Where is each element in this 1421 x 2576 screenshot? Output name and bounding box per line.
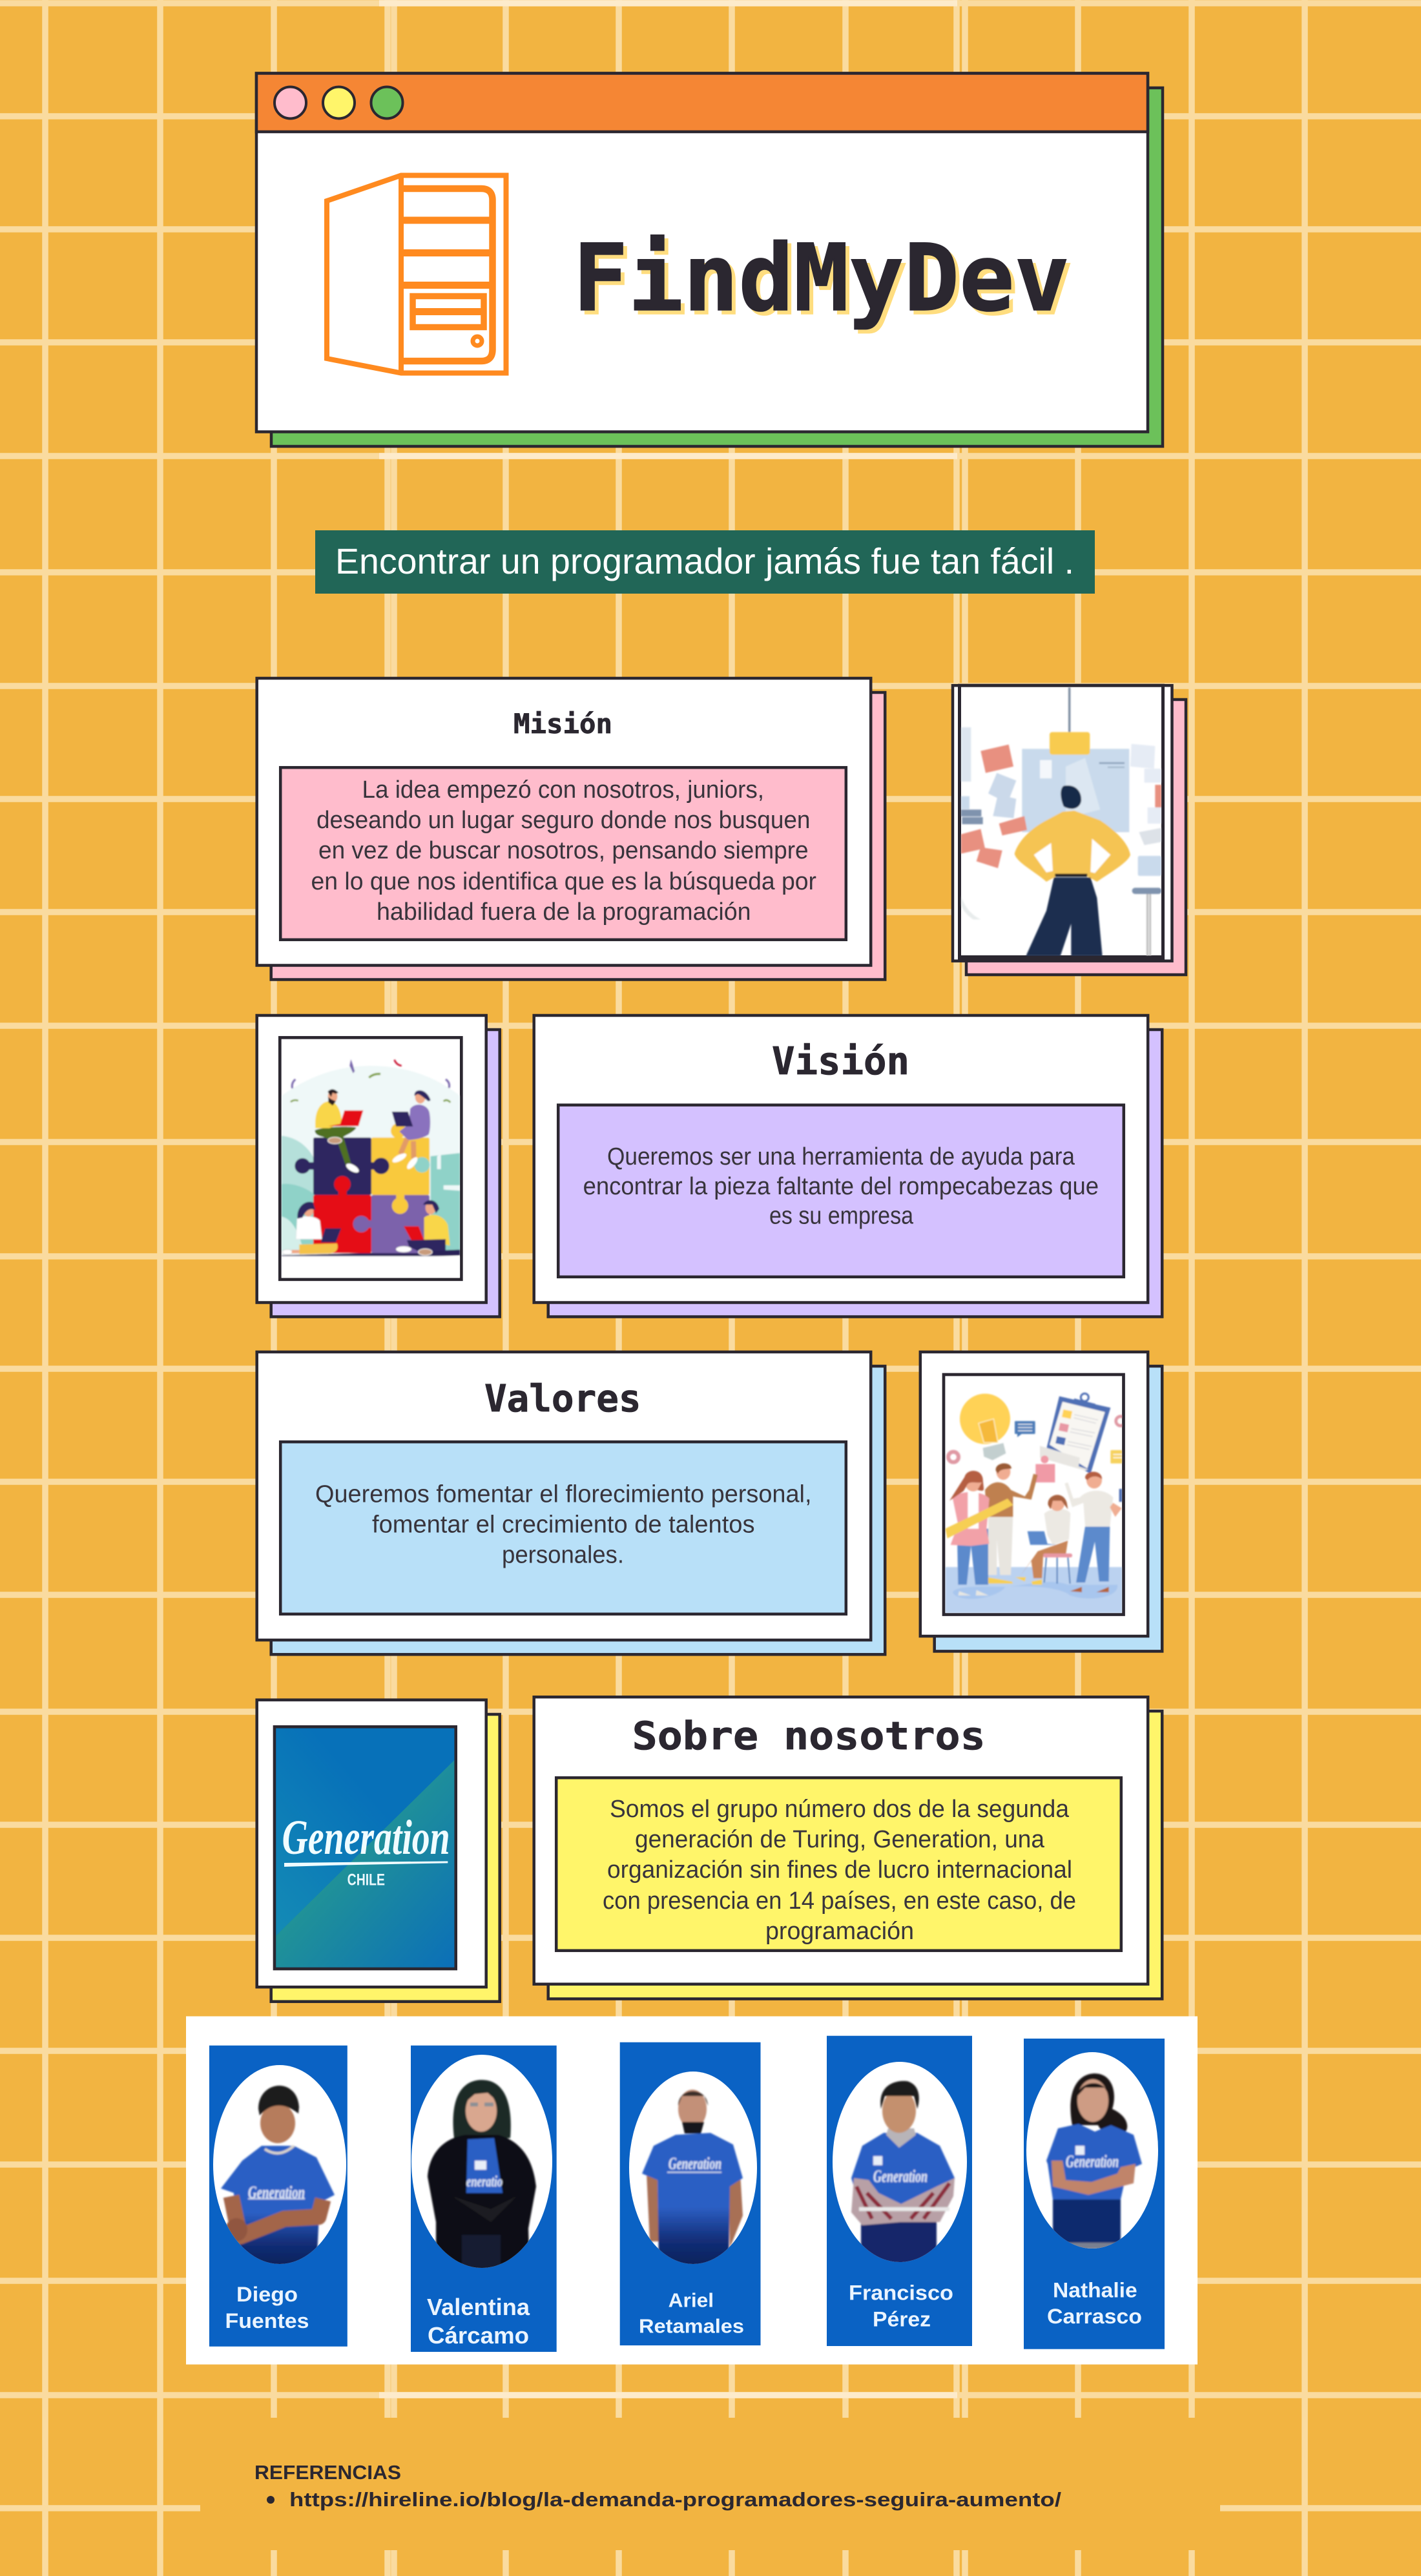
title: FindMyDev [577,228,1074,336]
team member: Nathalie Carrasco: Nathalie [1053,2279,1137,2302]
text block: sobre nosotros: programación [765,1918,914,1945]
panel: misión illustration [953,685,1186,975]
team member: Diego Fuentes: Fuentes [225,2309,309,2332]
panel: visión illustration [257,1015,500,1316]
man with pencil [988,1516,1013,1575]
illustration: team with ideas [945,1393,1125,1613]
text block: sobre nosotros: organización sin fines de lucro internacional [607,1856,1072,1884]
text block: misión [280,767,846,940]
text block: visión: Queremos ser una herramienta de ayuda para [607,1143,1075,1170]
woman with pencil [957,1529,988,1584]
panel: valores illustration [920,1352,1162,1651]
text block: valores: personales. [502,1542,624,1569]
tagline banner [315,530,1095,594]
team member: Ariel Retamales: Ariel [669,2289,714,2312]
illustration: person facing board [961,687,1161,956]
references [254,2461,1061,2511]
panel: Misión [257,678,885,979]
team member: Diego Fuentes: Generation [248,2183,305,2202]
references: REFERENCIAS [254,2461,401,2484]
text block: visión: encontrar la pieza faltante del rompecabezas que [583,1173,1099,1200]
text block: visión: es su empresa [769,1203,914,1230]
woman bottom-left [296,1216,322,1239]
woman bottom-right [424,1215,450,1245]
team member: Nathalie Carrasco: Carrasco [1047,2305,1142,2328]
heading: Visión: Visión [772,1039,909,1083]
logo: Generation Chile: Generation [282,1810,450,1865]
team member: Francisco Pérez: Pérez [873,2308,931,2331]
panel: team photos [186,2017,1198,2364]
team member: Diego Fuentes: Diego [236,2283,298,2306]
text block: visión [558,1105,1124,1277]
team member: Francisco Pérez [827,2036,972,2346]
panel: header window [256,74,1163,446]
illustration: puzzle team [282,1059,460,1278]
team member: Nathalie Carrasco: Generation [1066,2152,1119,2171]
text block: sobre nosotros: Somos el grupo número dos de la segunda [610,1796,1070,1823]
logo: Generation Chile: CHILE [347,1871,385,1889]
text block: sobre nosotros: generación de Turing, Generation, una [635,1826,1045,1853]
team member: Valentina Cárcamo: eneratio [466,2174,503,2190]
team member: Diego Fuentes [209,2046,347,2347]
woman top-right [399,1105,430,1140]
team member: Francisco Pérez: Francisco [849,2281,953,2305]
text block: sobre nosotros [556,1778,1121,1951]
text block: valores: fomentar el crecimiento de talentos [372,1511,754,1539]
heading: Misión: Misión [513,708,612,740]
references: https://hireline.io/blog/la-demanda-programadores-seguira-aumento/ [289,2488,1061,2511]
panel: Valores [257,1352,885,1654]
heading: Valores: Valores [484,1376,641,1420]
text block: misión: deseando un lugar seguro donde nos busquen [316,807,810,834]
text block: misión: en lo que nos identifica que es la búsqueda por [311,868,816,895]
heading: Sobre nosotros: Sobre nosotros [632,1714,986,1759]
text block: misión: La idea empezó con nosotros, juniors, [362,776,764,804]
team member: Ariel Retamales [620,2042,761,2345]
team member: Valentina Cárcamo: Cárcamo [428,2322,529,2349]
panel: Visión [534,1015,1162,1316]
icon: computer tower [327,176,506,373]
team member: Ariel Retamales: Generation [669,2154,721,2173]
text block: valores [280,1442,846,1614]
team member: Valentina Cárcamo [411,2046,557,2352]
window title bar [256,74,1148,132]
text block: sobre nosotros: con presencia en 14 países, en este caso, de [603,1887,1076,1915]
team member: Francisco Pérez: Generation [873,2166,928,2186]
panel: Sobre nosotros [534,1697,1162,1999]
tagline banner: Encontrar un programador jamás fue tan fácil . [335,541,1074,581]
team member: Valentina Cárcamo: Valentina [427,2294,530,2320]
text block: misión: habilidad fuera de la programación [377,898,751,926]
man top-left [315,1127,357,1165]
title: FindMyDev [573,224,1070,332]
panel: Generation logo card [257,1700,500,2002]
text block: misión: en vez de buscar nosotros, pensando siempre [318,837,809,864]
seated woman [1019,1541,1068,1578]
logo: Generation Chile [275,1727,456,1969]
text block: valores: Queremos fomentar el florecimiento personal, [315,1481,811,1508]
standing man [1076,1526,1110,1583]
team member: Nathalie Carrasco [1024,2039,1165,2349]
team member: Ariel Retamales: Retamales [639,2315,744,2338]
